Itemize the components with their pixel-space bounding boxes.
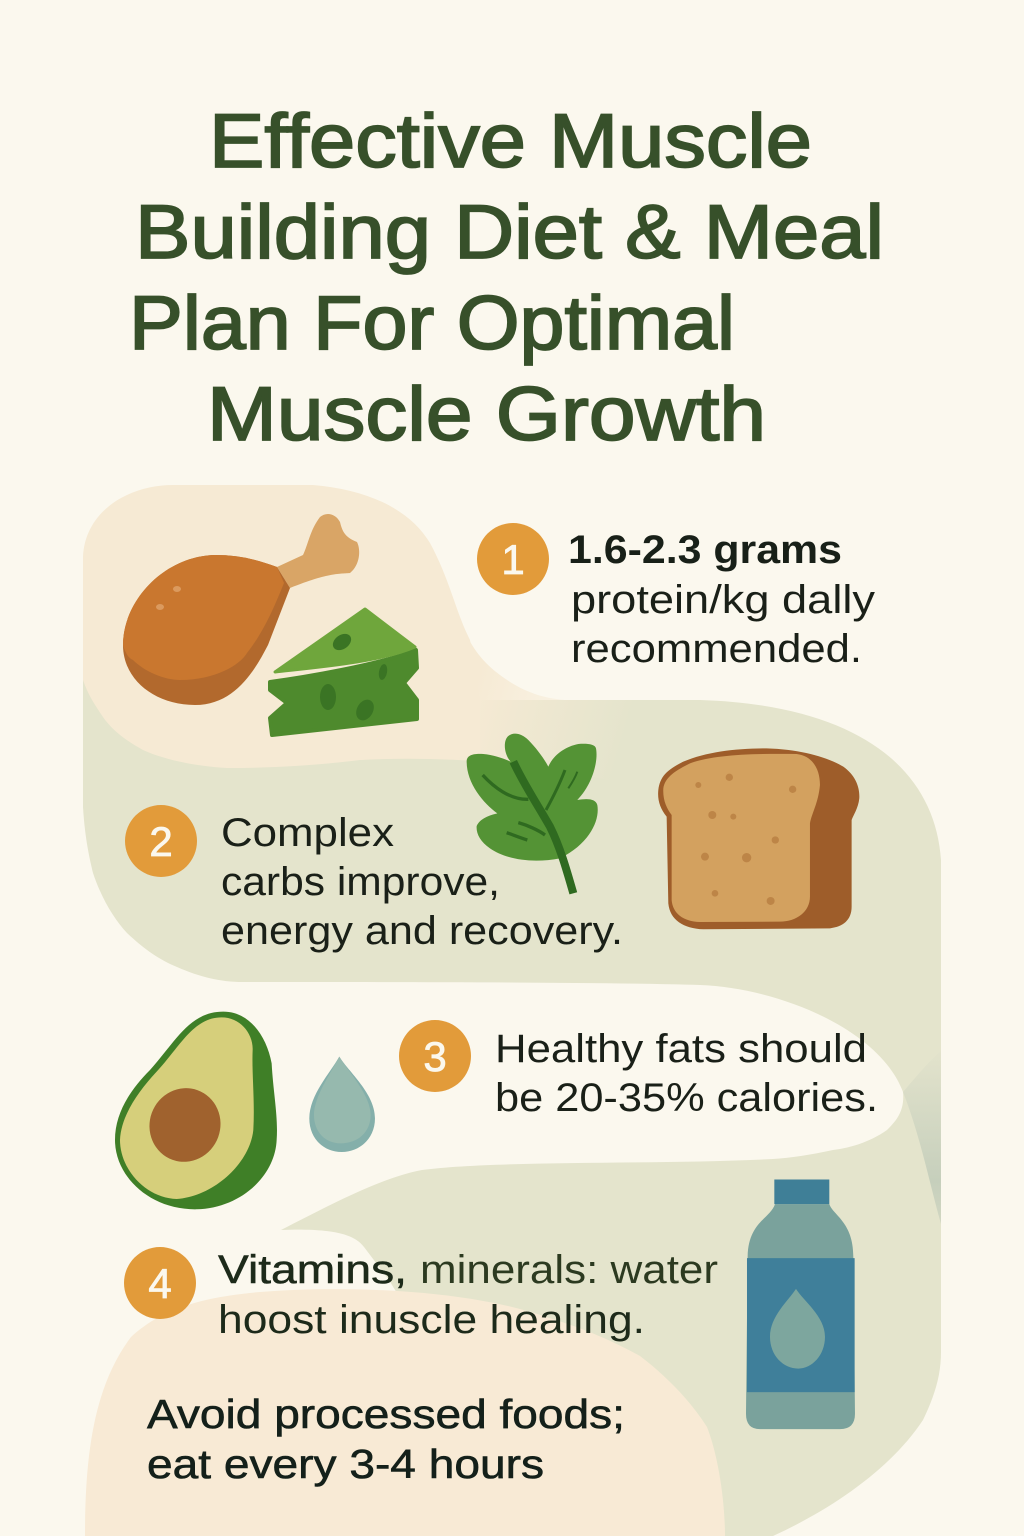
panel: peach protein blob [83, 485, 480, 768]
title: Effective Muscle [209, 99, 812, 184]
icon: bread slice [658, 748, 859, 929]
step 4: micronutrients: 4 [148, 1260, 172, 1307]
step 2: carbs [125, 805, 623, 953]
step 2: carbs: Complex [221, 811, 394, 855]
icon: green cheese wedge [270, 609, 417, 735]
closing tip: eat every 3-4 hours [147, 1441, 544, 1487]
closing tip [147, 1391, 625, 1487]
panel: fats cream band [0, 982, 903, 1536]
title: Plan For Optimal [129, 281, 735, 366]
icon: water bottle [746, 1179, 855, 1429]
step 1: protein [477, 523, 875, 671]
panel: peach tips blob [85, 1289, 725, 1536]
step 3: fats: 3 [423, 1033, 447, 1080]
step 4: micronutrients: minerals: water [420, 1248, 718, 1292]
step 3: fats: Healthy fats should [495, 1027, 867, 1071]
title: Muscle Growth [207, 372, 766, 457]
step 2: carbs: energy and recovery. [221, 909, 623, 953]
icon: leaf [467, 734, 598, 893]
closing tip: Avoid processed foods; [147, 1391, 625, 1437]
step 3: fats [399, 1020, 878, 1120]
step 3: fats: be 20-35% calories. [495, 1076, 878, 1120]
step 4: micronutrients: Vitamins, [218, 1248, 407, 1292]
step 1: protein: recommended. [571, 627, 862, 671]
panel: peach protein fade [360, 620, 640, 790]
step 2: carbs: carbs improve, [221, 860, 500, 904]
icon: oil drop [309, 1057, 375, 1152]
icon: chicken drumstick [123, 514, 359, 705]
panel: green side shadow [903, 1051, 941, 1224]
step 1: protein: protein/kg dally [571, 578, 875, 622]
title: Building Diet & Meal [135, 190, 884, 275]
step 4: micronutrients: hoost inuscle healing. [218, 1298, 645, 1342]
panel: green blob [83, 620, 941, 1536]
step 1: protein: 1.6-2.3 grams [568, 528, 842, 572]
title [129, 99, 884, 457]
step 1: protein: 1 [501, 536, 525, 583]
step 2: carbs: 2 [149, 818, 173, 865]
step 4: micronutrients [124, 1247, 718, 1342]
icon: avocado [115, 1012, 277, 1209]
